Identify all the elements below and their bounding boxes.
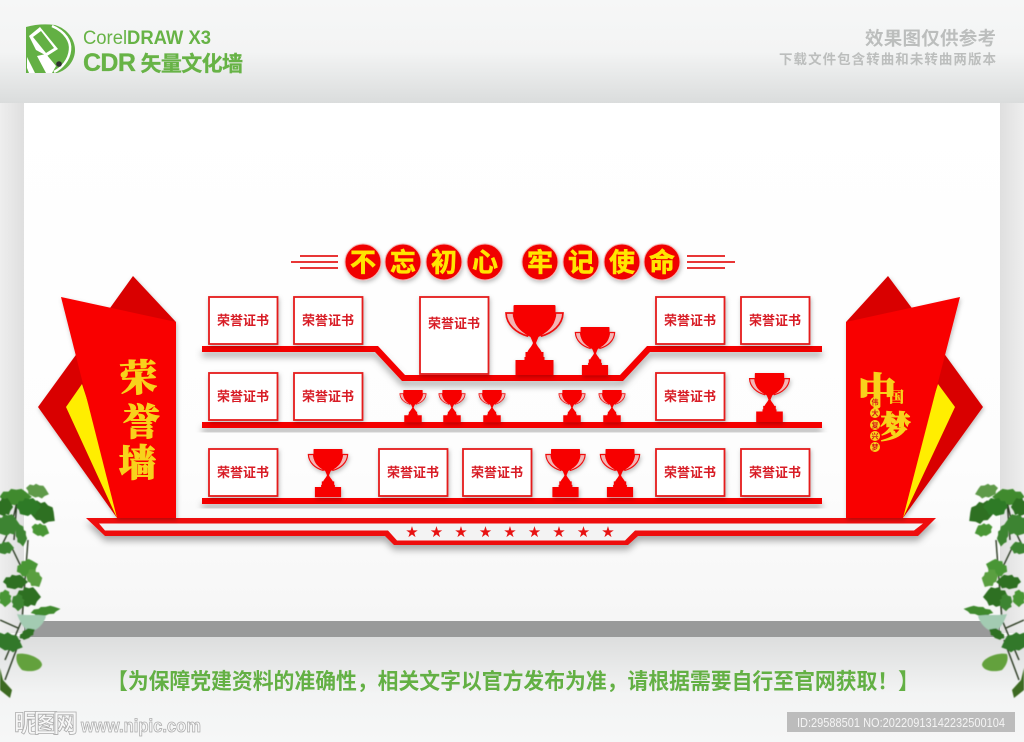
emblem 中国梦: 中	[858, 361, 896, 416]
trophy small	[439, 390, 465, 422]
banner title 荣誉墙: 誉	[123, 392, 160, 446]
slogan characters: 初	[431, 242, 457, 280]
watermark: id box	[787, 712, 1015, 732]
slogan characters: 心	[472, 242, 498, 280]
slogan characters: 牢	[527, 242, 553, 280]
emblem 中国梦: 国	[889, 386, 904, 407]
stars: ★	[430, 523, 443, 541]
background: bottom band	[0, 636, 1024, 742]
plant: left vine	[0, 482, 61, 698]
watermark: nipic: 昵图网	[14, 710, 78, 738]
logo text: CorelDRAW X3: CorelDRAW X3	[83, 28, 211, 49]
certificates: row 3	[209, 449, 810, 496]
certificates: row 1	[209, 297, 810, 374]
logo: CorelDRAW icon	[26, 24, 75, 73]
certificate	[294, 373, 362, 420]
slogan characters: 使	[609, 242, 635, 280]
back folds	[105, 276, 176, 322]
emblem 中国梦: 大	[872, 408, 878, 418]
certificate	[294, 297, 362, 344]
certificate tall	[420, 297, 488, 374]
heading: slogan banner	[291, 242, 735, 280]
slogan characters: 不	[350, 242, 376, 280]
certificate	[741, 297, 810, 344]
slogan characters: 忘	[390, 242, 416, 280]
stars	[405, 523, 615, 541]
logo text: CDR 矢量文化墙: CDR 矢量文化墙	[83, 49, 243, 77]
main banner	[61, 297, 176, 518]
background: left margin	[0, 103, 24, 633]
background: top band	[0, 0, 1024, 104]
shelf 3	[202, 498, 822, 504]
trophy small	[559, 390, 585, 422]
certificate	[379, 449, 448, 496]
trophy row 3 left	[308, 449, 348, 497]
panel: left banner	[38, 276, 176, 518]
shelf 2	[202, 422, 822, 428]
certificate tall: 荣誉证书	[428, 313, 480, 332]
left decorative lines	[291, 256, 338, 268]
banner title 荣誉墙: 荣	[119, 347, 158, 403]
trophy row 2 right	[750, 373, 789, 422]
certificate	[741, 449, 810, 496]
emblem 中国梦: 伟	[872, 398, 878, 408]
watermark: nipic	[14, 710, 201, 738]
yellow fold	[66, 384, 120, 518]
certificate	[656, 373, 724, 420]
certificate	[463, 449, 532, 496]
trophy small	[400, 390, 426, 422]
wall floor strip	[24, 621, 1000, 637]
main banner	[846, 297, 960, 518]
trophy small	[599, 390, 625, 422]
note: 效果图仅供参考: 效果图仅供参考	[865, 28, 996, 49]
certificates: row 2	[209, 373, 724, 420]
slogan characters	[350, 242, 675, 280]
panel: right banner	[846, 276, 983, 518]
trophy large	[506, 305, 563, 375]
emblem 中国梦: 兴	[872, 432, 878, 442]
yellow fold	[900, 384, 955, 518]
note: 下载文件包含转曲和未转曲两版本: 下载文件包含转曲和未转曲两版本	[779, 51, 996, 67]
watermark: nipic: www.nipic.com	[80, 716, 201, 736]
certificate	[209, 373, 278, 420]
slogan characters: 记	[568, 242, 594, 280]
slogan circles	[345, 244, 680, 280]
emblem 中国梦	[858, 361, 911, 452]
stars: ★	[528, 523, 541, 541]
stars: ★	[601, 523, 615, 541]
slogan characters: 命	[649, 242, 675, 280]
stars: ★	[454, 523, 468, 541]
background: right margin	[1000, 103, 1024, 633]
certificate	[209, 297, 278, 344]
emblem 中国梦: 复	[872, 420, 878, 430]
certificate	[656, 297, 724, 344]
trophies	[308, 305, 789, 497]
plant: right vine	[963, 482, 1024, 698]
trophy row 3	[546, 449, 585, 497]
trophy small	[479, 390, 505, 422]
shelf 1	[202, 346, 822, 381]
stars: ★	[503, 523, 517, 541]
emblem 中国梦: 梦	[880, 402, 911, 447]
stars: ★	[405, 523, 419, 541]
stars: ★	[577, 523, 590, 541]
banner title 荣誉墙	[119, 347, 160, 487]
trophy row 3	[600, 449, 640, 497]
certificate	[656, 449, 724, 496]
base platform with stars	[86, 518, 936, 545]
back folds	[846, 276, 917, 322]
trophy medium	[575, 327, 615, 375]
stars: ★	[552, 523, 566, 541]
notice text: 【为保障党建资料的准确性，相关文字以官方发布为准，请根据需要自行至官网获取！】	[107, 669, 919, 694]
banner title 荣誉墙: 墙	[119, 433, 156, 487]
emblem 中国梦: 梦	[872, 442, 878, 452]
certificate	[209, 449, 278, 496]
panel: white wall	[24, 103, 1000, 621]
right decorative lines	[687, 256, 735, 268]
stars: ★	[479, 523, 492, 541]
